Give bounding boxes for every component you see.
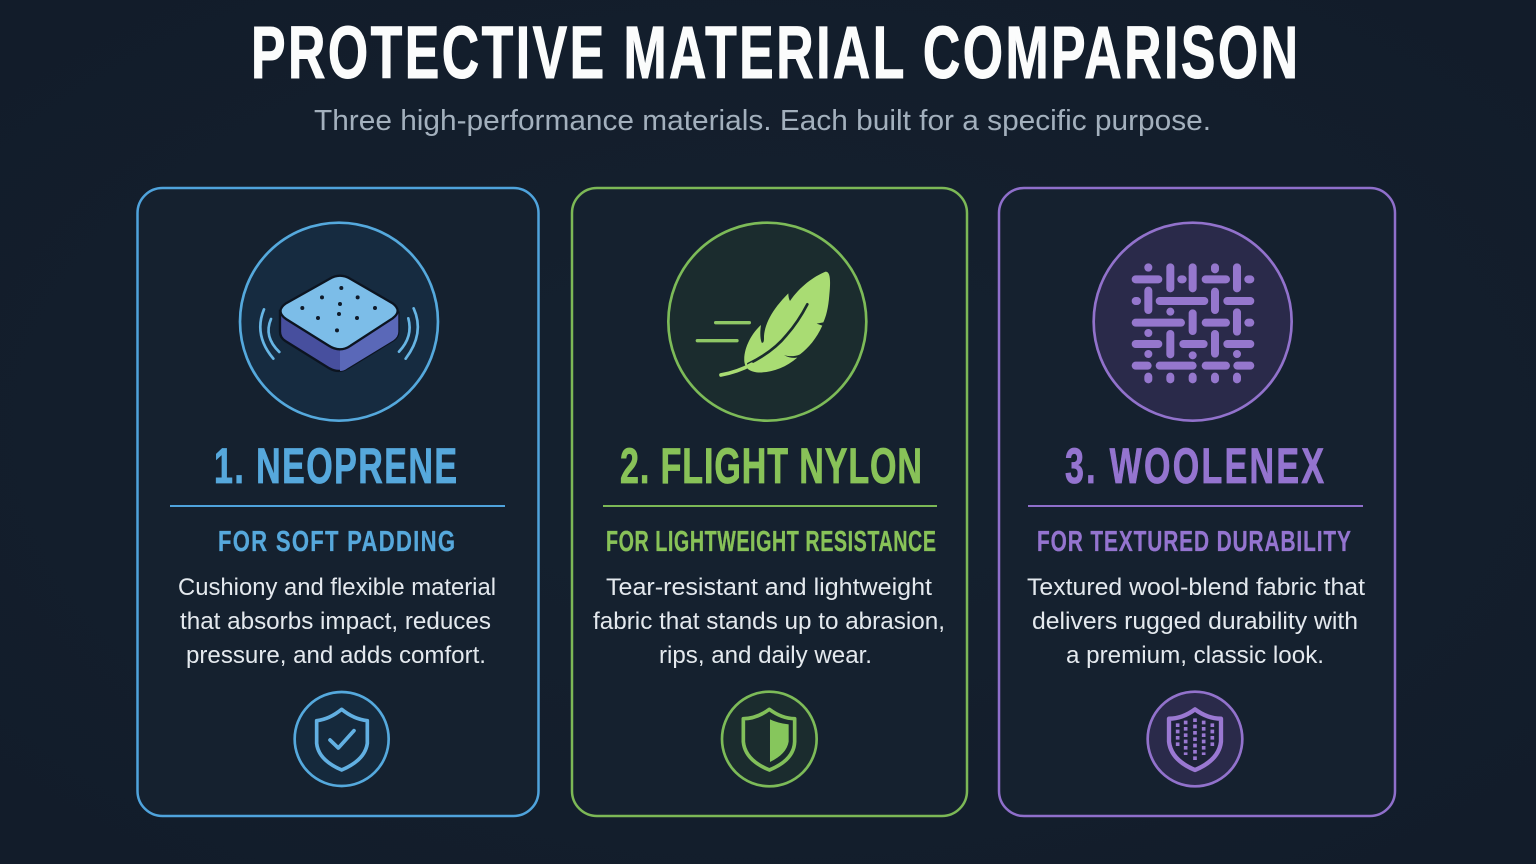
- icon: woven fabric: [1094, 223, 1292, 421]
- heading: 1. NEOPRENE: [214, 439, 457, 495]
- heading: 3. WOOLENEX: [1065, 439, 1324, 495]
- description: a premium, classic look.: [1066, 642, 1324, 669]
- icon: neoprene padding: [240, 223, 438, 421]
- subheading: FOR SOFT PADDING: [218, 526, 455, 558]
- description: [1027, 574, 1365, 669]
- description: Cushiony and flexible material: [178, 574, 496, 601]
- description: rips, and daily wear.: [659, 642, 872, 669]
- description: [593, 574, 945, 669]
- icon: textured shield: [1148, 692, 1242, 786]
- description: pressure, and adds comfort.: [186, 642, 486, 669]
- description: that absorbs impact, reduces: [180, 608, 491, 635]
- description: delivers rugged durability with: [1032, 608, 1358, 635]
- panel: neoprene: [138, 188, 538, 816]
- title: PROTECTIVE MATERIAL COMPARISON: [251, 11, 1298, 94]
- panel: woolenex: [999, 188, 1395, 816]
- description: fabric that stands up to abrasion,: [593, 608, 945, 635]
- subheading: FOR TEXTURED DURABILITY: [1037, 526, 1351, 558]
- description: Tear-resistant and lightweight: [606, 574, 932, 601]
- icon: shield check: [295, 692, 389, 786]
- description: [178, 574, 496, 669]
- icon: half shield: [722, 692, 817, 786]
- icon: feather: [668, 223, 866, 421]
- description: Textured wool-blend fabric that: [1027, 574, 1365, 601]
- subtitle: Three high-performance materials. Each built for a specific purpose.: [314, 105, 1211, 137]
- subheading: FOR LIGHTWEIGHT RESISTANCE: [606, 526, 936, 558]
- card border: [999, 188, 1395, 816]
- card border: [572, 188, 967, 816]
- panel: flight nylon: [572, 188, 967, 816]
- heading: 2. FLIGHT NYLON: [620, 439, 922, 495]
- card border: [138, 188, 538, 816]
